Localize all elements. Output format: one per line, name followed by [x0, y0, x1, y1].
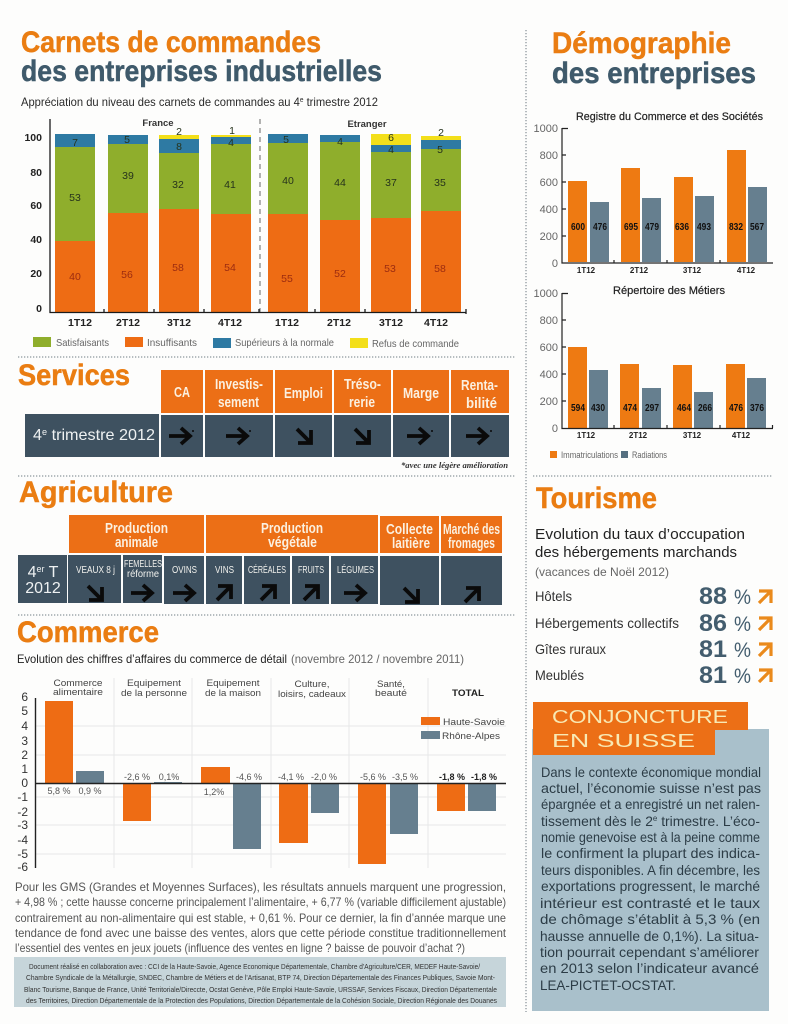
column labels: FRUITS	[298, 564, 324, 576]
asterisk markers	[192, 430, 492, 432]
bars: Etranger 4T12	[421, 127, 461, 313]
table: services	[25, 370, 509, 457]
x axis labels	[68, 317, 448, 329]
y axis labels: 60	[30, 200, 42, 212]
legend: order books: Refus de commande	[372, 338, 459, 350]
category labels: Equipement	[127, 678, 181, 689]
header cells: Emploi	[284, 386, 323, 402]
bar chart: répertoire des métiers: 200	[540, 396, 558, 408]
heading: commerce: Commerce	[17, 616, 159, 649]
bars: France 3T12: 32	[172, 179, 184, 191]
values: 266	[698, 403, 712, 414]
legend: order books	[33, 337, 459, 350]
x axis labels: 1T12	[68, 317, 92, 329]
row cells	[25, 414, 509, 457]
column labels: VEAUX 8 j	[76, 564, 115, 576]
table: occupation rates	[535, 583, 771, 689]
category labels: Culture,	[294, 679, 330, 690]
category labels: beauté	[375, 688, 407, 699]
value labels: 5,8 %	[47, 786, 71, 796]
category labels: TOTAL	[452, 688, 484, 699]
bars: France 2T12: 5	[124, 134, 130, 146]
legend: demography: Immatriculations	[561, 450, 618, 460]
categories: 2T12	[630, 266, 649, 275]
header cells: Investis-	[215, 377, 263, 393]
values: 479	[645, 222, 659, 233]
bar chart: répertoire des métiers: 0	[552, 423, 558, 435]
categories: 4T12	[737, 266, 756, 275]
heading: démographie	[552, 27, 756, 90]
bar chart: registre du commerce: 200	[540, 231, 558, 243]
x axis labels: 2T12	[116, 317, 140, 329]
header cells: sement	[218, 395, 259, 411]
bar chart: registre du commerce: 800	[540, 150, 558, 162]
values: 636	[675, 222, 689, 233]
categories: 2T12	[629, 431, 648, 440]
panel: credits: des Territoires, Direction Départementale de la Protection des Populations, Direction Départementale de la Cohésion Sociale, Direction Régionale des Douanes	[26, 996, 497, 1005]
bar chart: registre du commerce	[534, 111, 773, 275]
y axis labels: 5	[21, 704, 28, 718]
y axis labels: 2	[21, 748, 28, 762]
panel text: actuel, l’économie suisse n’est pas	[541, 780, 761, 796]
row: hébergements collectifs: Hébergements collectifs	[535, 615, 679, 631]
value labels: -3,5 %	[392, 772, 418, 782]
text block: GMS commentary: Pour les GMS (Grandes et Moyennes Surfaces), les résultats annuels marquent une progression,	[15, 880, 506, 894]
values: 476	[729, 403, 743, 414]
x axis labels: 4T12	[424, 317, 448, 329]
bars: Etranger 2T12	[320, 135, 360, 313]
values: 297	[645, 403, 659, 414]
row label: 2012	[25, 580, 61, 597]
heading: tourisme: Tourisme	[536, 482, 657, 515]
legend: regions	[421, 717, 505, 742]
text block: GMS commentary	[15, 880, 507, 955]
values: 594	[571, 403, 585, 414]
column labels: VINS	[215, 564, 234, 576]
values: 493	[697, 222, 711, 233]
subtitle: commerce: (novembre 2012 / novembre 2011)	[291, 652, 464, 666]
header cells: fromages	[448, 536, 495, 552]
bars: France 1T12: 53	[69, 192, 81, 204]
bar chart: répertoire des métiers	[534, 285, 773, 440]
bars: France 1T12	[55, 134, 95, 313]
subtitle: order book appreciation: trimestre 2012	[303, 95, 378, 109]
header cells: végétale	[268, 535, 317, 551]
stacked bar chart: order books	[24, 118, 466, 329]
header cells: Production	[105, 521, 168, 537]
row: hébergements collectifs: %	[734, 613, 751, 636]
table: agriculture	[18, 515, 502, 605]
panel: credits: Chambre Syndicale de la Métallurgie, SNDEC, Chambre de Métiers et de l’Artisanat, BTP 74, Direction Départementale des Finances Publiques, Savoie Mont-	[26, 973, 495, 982]
row label: T	[44, 564, 59, 581]
value labels: -4,6 %	[236, 772, 262, 782]
bar chart: répertoire des métiers: 600	[540, 342, 558, 354]
bars: France 4T12: 41	[224, 179, 236, 191]
panel: credits: Blanc Tourisme, Banque de France, Unité Territoriale/Direccte, Ocstat Genève, Pôle Emploi Haute-Savoie, URSSAF, Services Fiscaux, Direction Départementale	[24, 985, 497, 994]
bars: France 4T12	[211, 125, 251, 313]
values	[571, 222, 764, 233]
bar chart: registre du commerce: 0	[552, 258, 558, 270]
text block: GMS commentary: l’essentiel des ventes en jeux jouets (influence des ventes en ligne ? baisse de pouvoir d’achat ?)	[15, 941, 465, 955]
bars: France 3T12: 2	[176, 126, 182, 138]
row: gîtes ruraux: Gîtes ruraux	[535, 641, 606, 657]
bars: France 3T12: 8	[176, 141, 182, 153]
row label: trimestre 2012	[47, 427, 155, 444]
bar chart: registre du commerce: 400	[540, 204, 558, 216]
y axis labels	[24, 132, 42, 315]
bar chart: registre du commerce: 600	[540, 177, 558, 189]
values	[571, 403, 764, 414]
subtitle: order book appreciation: Appréciation du niveau des carnets de commandes au 4	[21, 95, 321, 109]
panel text: trimestre. L’éco-	[657, 813, 760, 829]
bars: France 2T12: 39	[122, 170, 134, 182]
legend: order books: Supérieurs à la normale	[235, 337, 334, 349]
header cells: bilité	[466, 396, 497, 412]
heading: services: Services	[18, 359, 130, 392]
y axis labels: 20	[30, 268, 42, 280]
value labels	[47, 772, 497, 797]
bar chart: répertoire des métiers: 400	[540, 369, 558, 381]
y axis labels: -3	[17, 818, 28, 832]
bars: France 4T12: 4	[228, 137, 234, 149]
values: 832	[729, 222, 743, 233]
footnote: *avec une légère amélioration	[401, 460, 508, 470]
bars	[568, 150, 767, 262]
value labels: -5,6 %	[360, 772, 386, 782]
subtitle: tourisme: (vacances de Noël 2012)	[535, 565, 669, 579]
column labels	[76, 558, 374, 580]
row: hôtels: Hôtels	[535, 588, 572, 604]
panel heading	[533, 702, 748, 755]
row: meublés: Meublés	[535, 667, 584, 683]
categories: 1T12	[577, 266, 596, 275]
panel text: Dans le contexte économique mondial	[541, 764, 761, 780]
value labels: -4,1 %	[278, 772, 304, 782]
category labels: Equipement	[206, 678, 260, 689]
y axis labels: -4	[17, 833, 28, 847]
category labels: alimentaire	[53, 687, 103, 698]
x axis labels: 3T12	[167, 317, 191, 329]
x axis labels: 1T12	[275, 317, 299, 329]
chart title: Répertoire des Métiers	[613, 285, 725, 297]
value labels: 1,2%	[204, 787, 224, 797]
y axis labels: 6	[21, 690, 28, 704]
panel text	[540, 764, 761, 993]
subtitle: tourisme: Evolution du taux d’occupation	[535, 526, 745, 543]
y axis labels: -1	[17, 790, 28, 804]
panel text: en 2013 selon l’indicateur avancé	[540, 960, 759, 976]
row: gîtes ruraux	[535, 636, 771, 663]
panel text: tion pourrait cependant s’améliorer	[540, 944, 759, 960]
bars: Etranger 4T12: 35	[434, 177, 446, 189]
subtitle: commerce	[17, 652, 464, 666]
panel text: e	[653, 814, 658, 823]
bars: Etranger 3T12	[371, 132, 411, 313]
header cells	[161, 370, 509, 413]
categories: 1T12	[577, 431, 596, 440]
bars: Etranger 3T12: 53	[384, 263, 396, 275]
panel text: tissement dès le 2	[541, 813, 654, 829]
y axis labels: 100	[24, 132, 42, 144]
x axis labels: 4T12	[218, 317, 242, 329]
row: hôtels	[535, 583, 771, 610]
row: hébergements collectifs: 86	[699, 610, 727, 637]
bars: Etranger 1T12: 5	[283, 134, 289, 146]
categories: 3T12	[683, 431, 702, 440]
bar chart: répertoire des métiers: 800	[540, 315, 558, 327]
legend: order books: Satisfaisants	[56, 337, 109, 349]
bars: Etranger 1T12	[268, 134, 308, 313]
heading: carnets de commandes: des entreprises industrielles	[21, 55, 382, 88]
value labels: -2,0 %	[311, 772, 337, 782]
categories: 4T12	[732, 431, 751, 440]
row label: e	[42, 427, 47, 437]
category labels: Commerce	[54, 678, 102, 689]
group labels: Etranger	[347, 119, 387, 130]
legend: demography	[550, 450, 667, 460]
bars: Etranger 1T12: 40	[282, 175, 294, 187]
y axis labels: -2	[17, 805, 28, 819]
panel heading: CONJONCTURE	[552, 707, 728, 727]
row label: er	[36, 564, 44, 574]
row label: 4	[28, 564, 36, 581]
legend: order books: Insuffisants	[147, 337, 197, 349]
header cells: Collecte	[386, 522, 433, 538]
header cells: CA	[174, 385, 190, 401]
bar chart: registre du commerce: 1000	[534, 123, 558, 135]
column labels: OVINS	[172, 564, 197, 576]
y axis labels: -5	[17, 847, 28, 861]
chart title: Registre du Commerce et des Sociétés	[576, 111, 763, 123]
y axis labels: 80	[30, 167, 42, 179]
bars: Etranger 3T12: 37	[385, 177, 397, 189]
Rhône-Alpes bars	[76, 771, 496, 849]
category labels: de la personne	[121, 688, 187, 699]
legend: regions: Haute-Savoie	[443, 717, 505, 728]
bars: Etranger 3T12: 6	[388, 132, 394, 144]
y axis labels: 0	[36, 303, 42, 315]
header cells: rerie	[349, 395, 375, 411]
heading: démographie: Démographie	[552, 27, 731, 60]
column labels: LÉGUMES	[337, 563, 374, 576]
header cells	[69, 515, 502, 553]
values: 376	[750, 403, 764, 414]
value labels: -1,8 %	[439, 772, 465, 782]
bars: France 3T12: 58	[172, 262, 184, 274]
row: meublés: %	[734, 665, 751, 688]
categories	[577, 266, 756, 275]
y axis labels: 40	[30, 234, 42, 246]
bars: Etranger 4T12: 2	[438, 127, 444, 139]
row: gîtes ruraux: 81	[699, 636, 727, 663]
bars: France 1T12: 40	[69, 271, 81, 283]
subtitle: commerce: Evolution des chiffres d’affaires du commerce de détail	[17, 652, 287, 666]
panel text: épargnée et a enregistré un net ralen-	[541, 796, 760, 812]
heading: agriculture: Agriculture	[19, 476, 173, 509]
trend arrows	[169, 428, 487, 444]
panel text: exportations progressent, le marché	[541, 878, 760, 894]
Haute-Savoie bars	[45, 701, 465, 864]
header cells: laitière	[392, 536, 430, 552]
value labels: -1,8 %	[471, 772, 497, 782]
category labels: de la maison	[205, 688, 261, 699]
bars: France 4T12: 54	[224, 262, 236, 274]
category labels: Santé,	[377, 679, 405, 690]
panel: credits	[14, 957, 506, 1007]
values: 567	[750, 222, 764, 233]
panel text: nomie genevoise est à la peine comme	[541, 829, 760, 845]
group labels: France	[142, 118, 174, 129]
bars: Etranger 1T12: 55	[281, 273, 293, 285]
row: hôtels: 88	[699, 583, 727, 610]
value labels: -2,6 %	[124, 772, 150, 782]
panel heading: EN SUISSE	[552, 731, 695, 751]
category labels: loisirs, cadeaux	[278, 689, 346, 700]
text block: GMS commentary: + 4,98 % ; cette hausse concerne principalement l’alimentaire, + 6,77 % (variable difficilement ajustable)	[15, 895, 506, 909]
values: 464	[677, 403, 691, 414]
value labels: 0,9 %	[78, 786, 102, 796]
values: 476	[593, 222, 607, 233]
column labels: réforme	[127, 568, 159, 580]
panel: conjoncture en suisse	[532, 702, 769, 1011]
legend: regions: Rhône-Alpes	[442, 731, 500, 742]
y axis labels: 0	[21, 776, 28, 790]
panel text: LEA-PICTET-OCSTAT.	[540, 977, 676, 993]
header cells: Marché des	[443, 522, 500, 538]
column labels: FEMELLES	[124, 558, 162, 570]
value labels: 0,1%	[159, 772, 179, 782]
y axis labels: 1	[21, 762, 28, 776]
bars: France 4T12: 1	[229, 125, 235, 137]
row cells	[18, 555, 502, 605]
bars: France 2T12	[108, 134, 148, 313]
bars: Etranger 3T12: 4	[388, 144, 394, 156]
x axis labels: 2T12	[327, 317, 351, 329]
bars: France 1T12: 7	[72, 137, 78, 149]
column labels: CÉRÉALES	[248, 563, 286, 576]
row: hébergements collectifs	[535, 610, 771, 637]
bars: Etranger 2T12: 4	[337, 136, 343, 148]
row: meublés: 81	[699, 662, 727, 689]
panel text: hausse annuelle de 0,1%). La situa-	[540, 928, 759, 944]
y axis labels: 4	[21, 719, 28, 733]
values: 600	[571, 222, 585, 233]
text block: GMS commentary: tendance de fond avec une baisse des ventes, alors que cette période constitue traditionnellement	[15, 926, 507, 940]
subtitle: order book appreciation: e	[300, 97, 304, 104]
text block: GMS commentary: contrairement au non-alimentaire qui est stable, + 0,61 %. Pour ce dernier, la fin d’année marque une	[15, 911, 506, 925]
heading: carnets de commandes: Carnets de commandes	[21, 26, 321, 59]
panel: credits: Document réalisé en collaboration avec : CCI de la Haute-Savoie, Agence Economique Départementale, Chambre d’Agriculture/CER, MEDEF Haute-Savoie/	[29, 962, 481, 971]
bars: Etranger 4T12: 5	[437, 144, 443, 156]
panel text: intérieur est contrasté et le taux	[540, 895, 760, 911]
bars: Etranger 4T12: 58	[434, 263, 446, 275]
x axis labels: 3T12	[379, 317, 403, 329]
categories	[577, 431, 751, 440]
bars: France 2T12: 56	[121, 269, 133, 281]
panel text: de chômage s’établit à 5,3 % (en	[540, 911, 760, 927]
subtitle: tourisme: des hébergements marchands	[535, 544, 737, 561]
row label: 4	[33, 427, 42, 444]
heading: carnets de commandes	[21, 26, 382, 88]
values: 695	[624, 222, 638, 233]
bar chart: répertoire des métiers: 1000	[534, 288, 558, 300]
bars: Etranger 2T12: 44	[334, 177, 346, 189]
values: 430	[591, 403, 605, 414]
bars: France 3T12	[159, 126, 199, 313]
panel text: teurs disponibles. A fin décembre, les	[541, 862, 760, 878]
trend arrows	[88, 585, 479, 602]
y axis labels: -6	[17, 860, 28, 874]
header cells: Production	[261, 521, 323, 537]
heading: démographie: des entreprises	[552, 57, 756, 90]
header cells: animale	[115, 535, 158, 551]
legend: demography: Radiations	[632, 450, 667, 460]
category labels	[53, 678, 484, 700]
panel text: le confirment la plupart des indica-	[541, 845, 760, 861]
header cells: Marge	[403, 386, 439, 402]
subtitle: tourisme	[535, 526, 745, 579]
group labels	[142, 118, 387, 130]
values: 474	[623, 403, 637, 414]
header cells: Renta-	[461, 378, 498, 394]
y axis labels	[17, 690, 28, 874]
bars: Etranger 2T12: 52	[334, 268, 346, 280]
bars	[568, 347, 766, 428]
row: meublés	[535, 662, 771, 689]
bar chart: retail turnover	[17, 678, 506, 874]
categories: 3T12	[683, 266, 702, 275]
row: hôtels: %	[734, 586, 751, 609]
y axis labels: 3	[21, 734, 28, 748]
header cells: Tréso-	[344, 377, 381, 393]
row: gîtes ruraux: %	[734, 639, 751, 662]
row label	[25, 564, 61, 597]
